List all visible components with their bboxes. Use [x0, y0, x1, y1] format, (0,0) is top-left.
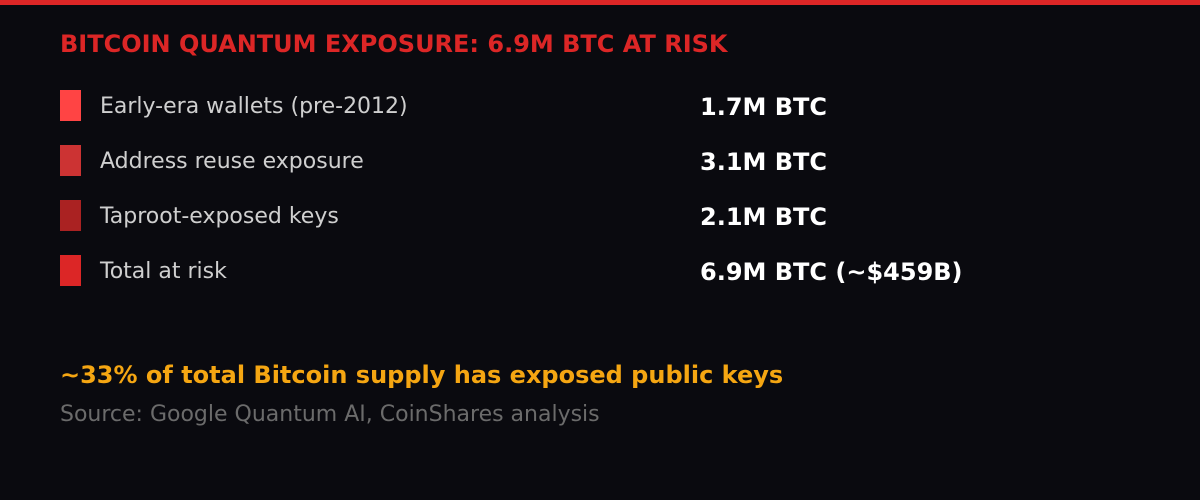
icon: swatch: [60, 200, 81, 231]
label: Address reuse exposure: [100, 149, 364, 174]
row: address reuse: [60, 145, 827, 176]
title: BITCOIN QUANTUM EXPOSURE: 6.9M BTC AT RISK: [60, 30, 728, 58]
value: 2.1M BTC: [700, 203, 827, 231]
icon: swatch: [60, 90, 81, 121]
callout: ~33% of total Bitcoin supply has exposed public keys: [60, 361, 783, 389]
label: Taproot-exposed keys: [100, 204, 339, 229]
label: Total at risk: [100, 259, 227, 284]
value: 3.1M BTC: [700, 148, 827, 176]
icon: swatch: [60, 145, 81, 176]
label: Early-era wallets (pre-2012): [100, 94, 408, 119]
row: taproot: [60, 200, 827, 231]
row: total: [60, 255, 963, 286]
row: early-era wallets: [60, 90, 827, 121]
value: 1.7M BTC: [700, 93, 827, 121]
top bar: [0, 0, 1200, 5]
icon: swatch: [60, 255, 81, 286]
source: Source: Google Quantum AI, CoinShares analysis: [60, 402, 600, 427]
value: 6.9M BTC (~$459B): [700, 258, 963, 286]
